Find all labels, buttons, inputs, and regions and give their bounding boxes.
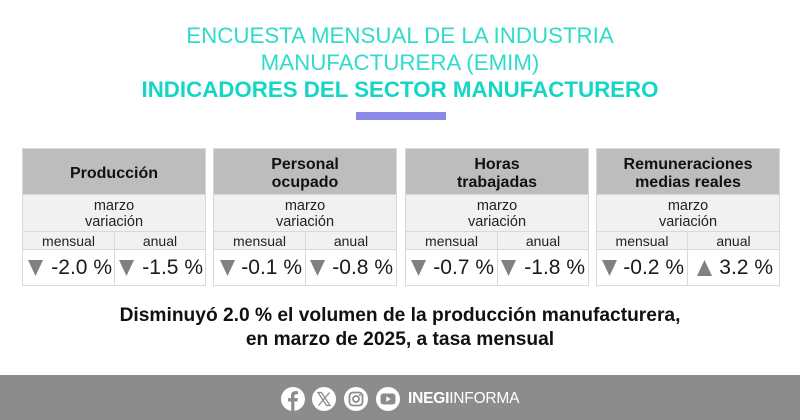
column label: anual: [688, 232, 779, 249]
column label: mensual: [406, 232, 497, 249]
period label: variación: [85, 214, 143, 230]
column label: mensual: mensual: [233, 233, 286, 249]
value: anual: -1.5 %: [142, 256, 203, 279]
accent bar: [356, 112, 446, 120]
value: anual: [306, 250, 396, 285]
value: mensual: [23, 250, 114, 285]
icon: instagram: [344, 387, 368, 411]
column label: anual: [115, 232, 205, 249]
panel heading: [23, 149, 205, 194]
title line 1: ENCUESTA MENSUAL DE LA INDUSTRIA: [186, 23, 614, 48]
panel heading: [406, 149, 588, 194]
summary text: Disminuyó 2.0 % el volumen de la producción manufacturera,: [120, 305, 680, 326]
period label: variación: [468, 214, 526, 230]
period label: [23, 195, 205, 231]
title line 3: INDICADORES DEL SECTOR MANUFACTURERO: [142, 77, 658, 102]
summary text: [120, 305, 680, 350]
value: mensual: [214, 250, 305, 285]
column label: mensual: [597, 232, 687, 249]
footer bar: [0, 375, 800, 420]
panel heading: [214, 149, 396, 194]
icon: X: [312, 387, 336, 411]
value: mensual: -0.2 %: [623, 256, 684, 279]
period label: [214, 195, 396, 231]
value: anual: [115, 250, 205, 285]
period label: variación: [276, 214, 334, 230]
column label: anual: anual: [143, 233, 177, 249]
panel heading: Horas: [474, 156, 520, 172]
panel heading: ocupado: [272, 174, 338, 190]
column label: anual: [498, 232, 588, 249]
icon: youtube: [376, 387, 400, 411]
column label: mensual: mensual: [616, 233, 668, 249]
period label: [406, 195, 588, 231]
column label: mensual: mensual: [425, 233, 478, 249]
column label: mensual: [214, 232, 305, 249]
value: anual: 3.2 %: [719, 256, 773, 279]
value: mensual: [597, 250, 687, 285]
period label: marzo: [94, 198, 134, 214]
value: anual: [688, 250, 779, 285]
period label: marzo: [668, 198, 708, 214]
panel: Producción: [22, 148, 206, 286]
icon: facebook: [281, 387, 305, 411]
column label: anual: [306, 232, 396, 249]
value: anual: -1.8 %: [524, 256, 585, 279]
panel heading: Personal: [271, 156, 339, 172]
panel heading: trabajadas: [457, 174, 537, 190]
panel: Horas trabajadas: [405, 148, 589, 286]
value: mensual: -0.1 %: [241, 256, 302, 279]
column label: mensual: mensual: [42, 233, 95, 249]
title line 2: MANUFACTURERA (EMIM): [261, 50, 539, 75]
title: [142, 23, 658, 102]
panel: Personal ocupado: [213, 148, 397, 286]
column label: anual: anual: [716, 233, 751, 249]
column label: mensual: [23, 232, 114, 249]
column label: anual: anual: [334, 233, 368, 249]
panel heading: Remuneraciones: [624, 156, 752, 172]
summary text: en marzo de 2025, a tasa mensual: [246, 329, 554, 350]
value: anual: -0.8 %: [332, 256, 393, 279]
value: anual: [498, 250, 588, 285]
value: mensual: -0.7 %: [433, 256, 494, 279]
panel heading: [597, 149, 779, 194]
panel: Remuneraciones medias reales: [596, 148, 780, 286]
brand label: INEGIINFORMA: [408, 390, 519, 407]
column label: anual: anual: [526, 233, 560, 249]
value: mensual: [406, 250, 497, 285]
period label: variación: [659, 214, 717, 230]
panel heading: Producción: [70, 164, 158, 182]
panel heading: medias reales: [635, 174, 741, 190]
period label: marzo: [285, 198, 325, 214]
period label: marzo: [477, 198, 517, 214]
period label: [597, 195, 779, 231]
value: mensual: -2.0 %: [51, 256, 112, 279]
